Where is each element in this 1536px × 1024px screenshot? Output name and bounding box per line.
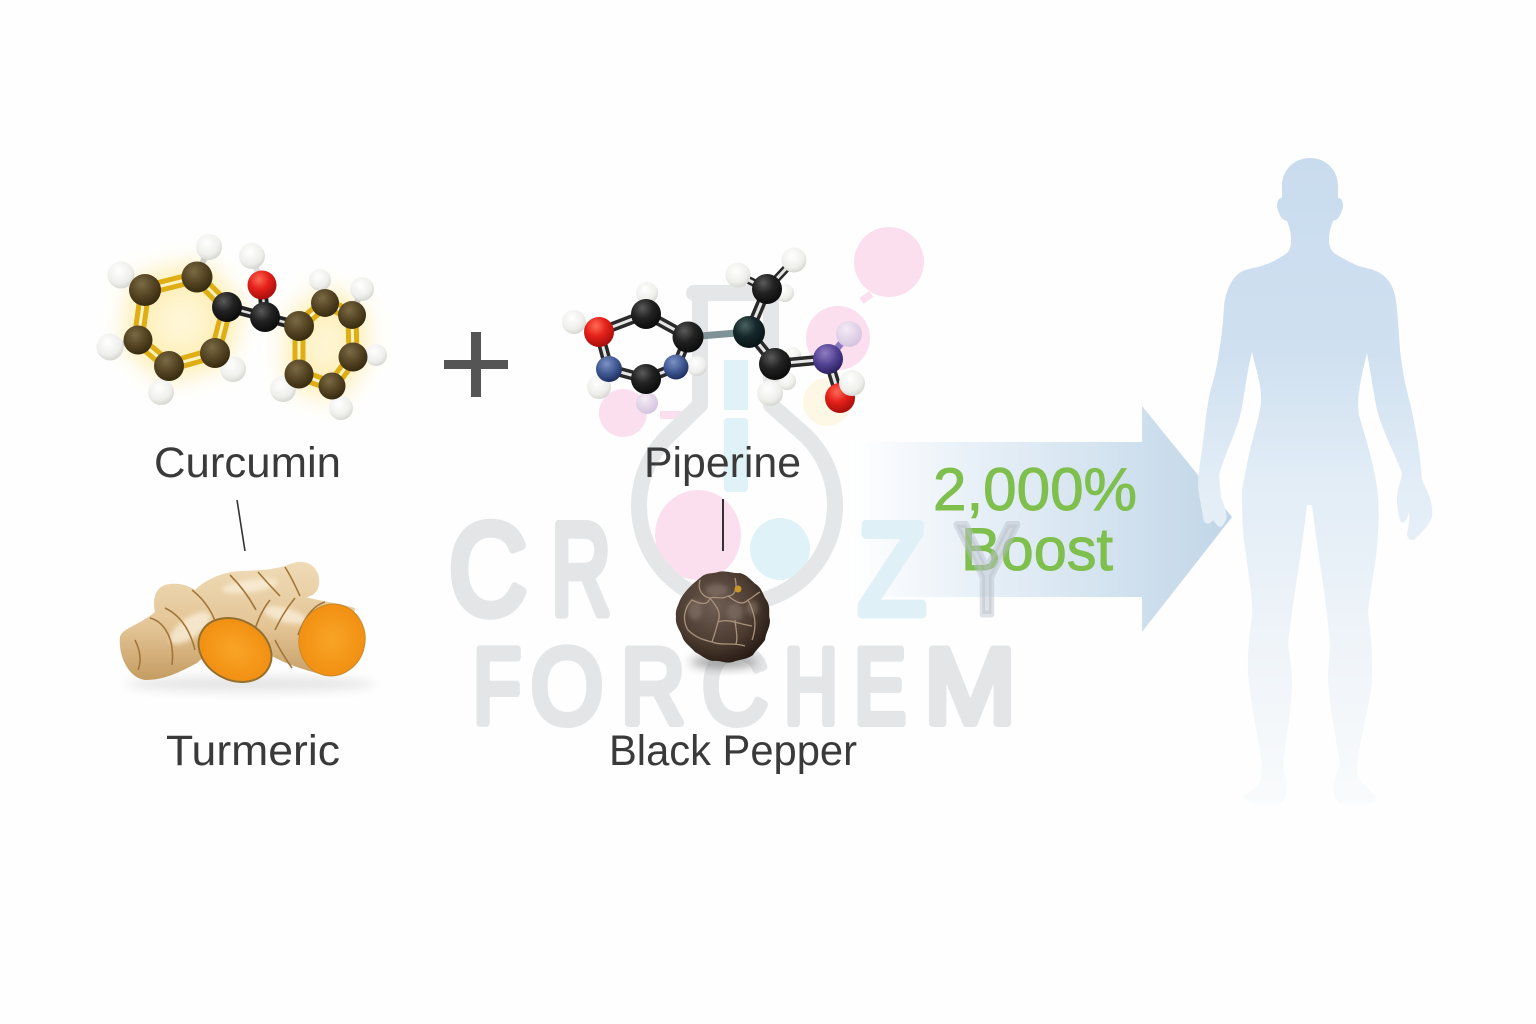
- icon: black peppercorn: [676, 571, 770, 668]
- watermark: FORCHEM letters: [473, 626, 1016, 746]
- label: Black Pepper: Black Pepper: [609, 727, 857, 775]
- watermark: FORCHEM letters: C: [702, 626, 768, 746]
- connector: curcumin to turmeric: [237, 500, 245, 551]
- label: Curcumin: Curcumin: [154, 439, 341, 487]
- boost callout text: 2,000%: [933, 456, 1137, 523]
- human body silhouette: [1198, 158, 1432, 804]
- yellow glow: [138, 277, 353, 386]
- peppercorn lighter patches: [688, 584, 758, 621]
- piperine molecule: [562, 248, 865, 414]
- watermark: FORCHEM letters: H: [784, 626, 838, 746]
- bonds: [574, 260, 849, 403]
- peppercorn cracks: [685, 578, 760, 646]
- watermark: CR letters: [449, 496, 611, 642]
- peppercorn tip: [734, 586, 742, 592]
- watermark: CR letters: R: [551, 496, 611, 642]
- boost callout text: Boost: [961, 516, 1113, 583]
- right rhizome: [232, 592, 355, 676]
- ring bonds: [138, 277, 227, 366]
- arrow: absorption boost: [850, 406, 1232, 632]
- watermark: FORCHEM letters: E: [854, 626, 906, 746]
- flask outline: [639, 293, 835, 604]
- back hydrogens: [636, 282, 801, 390]
- watermark: Z letter: Z: [858, 496, 926, 642]
- plus sign: [444, 332, 508, 397]
- watermark: Y letter: Y: [954, 496, 1020, 642]
- cut face right: [292, 598, 372, 682]
- root ring lines: [135, 567, 325, 670]
- watermark: FORCHEM letters: R: [621, 626, 685, 746]
- watermark: flask logo: [599, 227, 924, 604]
- pepper shadow: [690, 656, 758, 668]
- boost callout text: [933, 456, 1137, 583]
- cut face middle: [187, 606, 283, 694]
- peppercorn body: [676, 571, 770, 663]
- watermark: FORCHEM letters: M: [924, 626, 1016, 746]
- icon: turmeric root: [120, 562, 375, 694]
- linker bonds: [227, 285, 299, 326]
- oxygen atom: [248, 270, 276, 300]
- label: Piperine: Piperine: [644, 439, 801, 487]
- heavy atoms: [584, 274, 865, 413]
- carbon atoms: [124, 262, 368, 400]
- hydrogen atoms: [96, 234, 387, 420]
- watermark: FORCHEM letters: F: [473, 626, 521, 746]
- turmeric shadow: [125, 676, 375, 692]
- watermark: CR letters: C: [449, 496, 527, 642]
- front hydrogens: [562, 248, 862, 414]
- left and back rhizome: [120, 562, 319, 680]
- curcumin molecule: [96, 234, 387, 420]
- flask bubbles: [599, 227, 924, 580]
- rhizome highlights: [165, 576, 308, 650]
- label: Turmeric: Turmeric: [166, 727, 340, 775]
- connector: piperine to pepper: [722, 499, 724, 551]
- watermark: FORCHEM letters: O: [531, 626, 603, 746]
